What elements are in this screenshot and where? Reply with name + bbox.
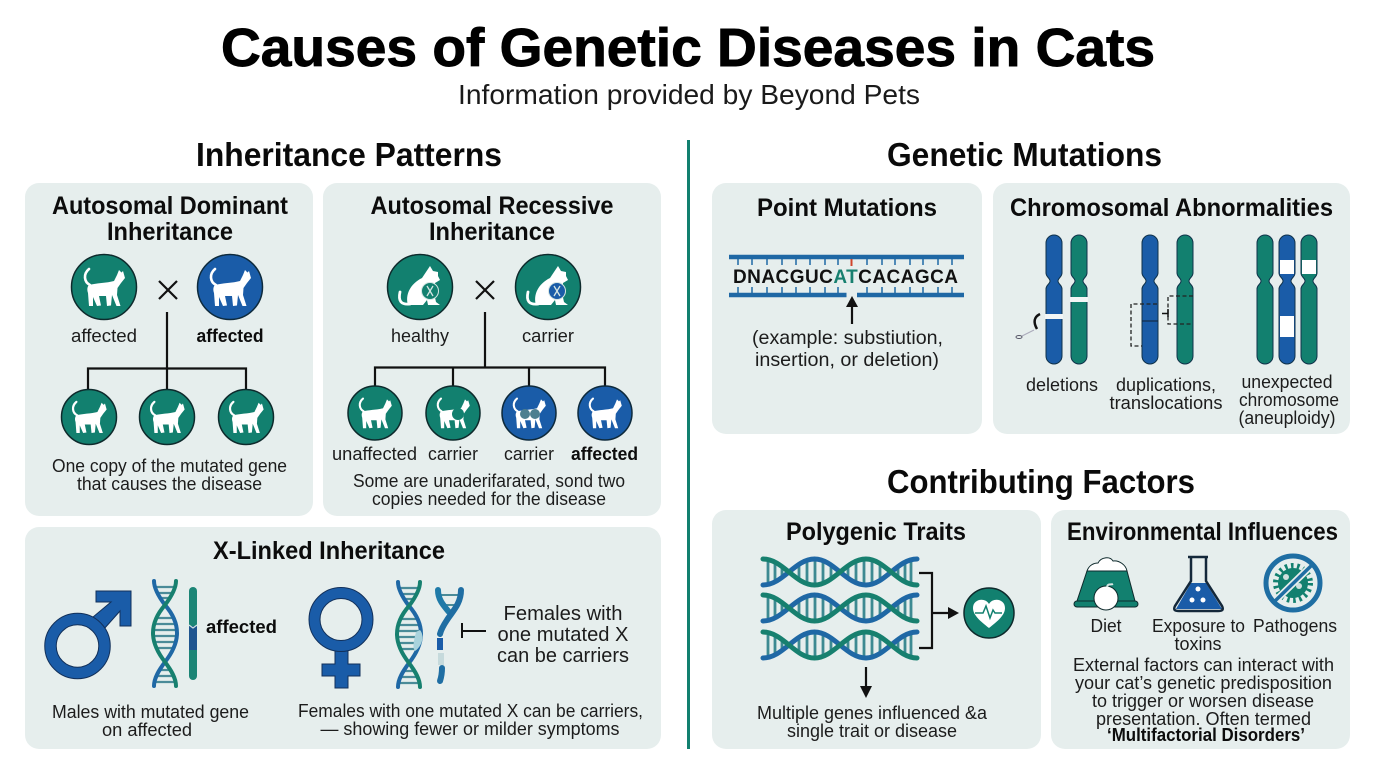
icon: healthy cat bbox=[388, 254, 452, 320]
label: aneuploidy: chromosome bbox=[1239, 390, 1339, 410]
panel heading bbox=[52, 192, 289, 246]
icon: parent cat teal bbox=[72, 254, 136, 320]
caption: males bbox=[52, 702, 249, 740]
panel heading: Autosomal Dominant bbox=[52, 192, 289, 220]
icon: offspring cat 1 bbox=[62, 390, 116, 444]
pedigree lines bbox=[375, 312, 605, 387]
panel heading: X-Linked Inheritance bbox=[213, 537, 445, 565]
label: pathogens: Pathogens bbox=[1253, 616, 1337, 636]
icon: carrier cat bbox=[516, 254, 580, 320]
description bbox=[752, 327, 943, 371]
description: External factors can interact with bbox=[1073, 655, 1334, 675]
label: aneuploidy bbox=[1238, 372, 1339, 428]
label: affected: affected bbox=[206, 617, 277, 637]
labels: offspring: carrier bbox=[428, 444, 478, 464]
description: to trigger or worsen disease bbox=[1092, 691, 1314, 711]
panel: X-Linked Inheritance bbox=[25, 527, 661, 749]
description: presentation. Often termed bbox=[1096, 709, 1311, 729]
labels: offspring: affected bbox=[571, 444, 638, 464]
caption: females bbox=[298, 701, 643, 739]
description bbox=[52, 456, 287, 494]
description bbox=[1073, 655, 1334, 745]
icon: broken X chromosome bbox=[438, 590, 461, 681]
subtitle: Information provided by Beyond Pets bbox=[458, 79, 920, 110]
icon: offspring cat 3 bbox=[218, 390, 274, 444]
description bbox=[353, 471, 625, 509]
icon: carrier kitten blue bbox=[502, 386, 556, 440]
description: Multiple genes influenced &a bbox=[757, 703, 988, 723]
DNA sequence diagram: DNACGUCATCACAGCA bbox=[733, 267, 958, 288]
chromosomes: duplications and translocations bbox=[1131, 235, 1193, 364]
caption: males: Males with mutated gene bbox=[52, 702, 249, 722]
label: aneuploidy: unexpected bbox=[1242, 372, 1332, 392]
title: Causes of Genetic Diseases in Cats bbox=[221, 18, 1155, 78]
description: that causes the disease bbox=[77, 474, 262, 494]
callout: females carriers bbox=[497, 603, 629, 667]
description: One copy of the mutated gene bbox=[52, 456, 287, 476]
label: duplications, translocations: translocations bbox=[1110, 393, 1222, 413]
callout: females carriers: Females with bbox=[504, 603, 622, 625]
panel: Autosomal Dominant Inheritance bbox=[25, 183, 313, 516]
panel: Autosomal Recessive Inheritance bbox=[323, 183, 661, 516]
panel: Point Mutations bbox=[712, 183, 982, 434]
label: affected: affected bbox=[71, 326, 137, 346]
center divider bbox=[687, 140, 690, 749]
panel heading: Inheritance bbox=[429, 218, 555, 246]
panel heading: Chromosomal Abnormalities bbox=[1010, 194, 1333, 222]
description: your cat’s genetic predisposition bbox=[1075, 673, 1332, 693]
heading: Genetic Mutations: Genetic Mutations bbox=[887, 136, 1162, 173]
icon: unaffected kitten bbox=[348, 386, 402, 440]
callout: females carriers: one mutated X bbox=[498, 624, 628, 646]
label: diet: Diet bbox=[1090, 616, 1122, 636]
description: Some are unaderifarated, sond two bbox=[353, 471, 625, 491]
label: deletions: deletions bbox=[1026, 375, 1098, 395]
panel heading: Point Mutations bbox=[757, 194, 937, 222]
arrow: down bbox=[860, 667, 872, 698]
icon: pathogen blocked bbox=[1266, 556, 1320, 610]
label: exposure to toxins bbox=[1152, 616, 1245, 654]
chromosomes: deletions bbox=[1016, 235, 1088, 364]
description: insertion, or deletion) bbox=[755, 349, 939, 371]
icon: flask with toxins bbox=[1174, 557, 1223, 611]
labels: offspring bbox=[332, 444, 638, 464]
labels: offspring: unaffected bbox=[332, 444, 417, 464]
caption: females: Females with one mutated X can be carriers, bbox=[298, 701, 643, 721]
panel heading: Autosomal Recessive bbox=[370, 192, 614, 220]
panel: Environmental Influences bbox=[1051, 510, 1350, 749]
callout: females carriers: can be carriers bbox=[497, 645, 629, 667]
caption: males: on affected bbox=[102, 720, 192, 740]
marker line bbox=[462, 623, 486, 638]
label: duplications, translocations bbox=[1110, 375, 1222, 413]
label: aneuploidy: (aneuploidy) bbox=[1238, 408, 1336, 428]
icon: X chromosome bar bbox=[189, 587, 197, 680]
description: copies needed for the disease bbox=[372, 489, 606, 509]
icon: food bowl bbox=[1074, 558, 1138, 610]
description: ‘Multifactorial Disorders’ bbox=[1107, 725, 1305, 745]
label: healthy: healthy bbox=[391, 326, 449, 346]
panel: Chromosomal Abnormalities bbox=[993, 183, 1350, 434]
heading: Contributing Factors: Contributing Factors bbox=[887, 463, 1195, 500]
icon: female symbol bbox=[314, 593, 368, 688]
description: (example: substiution, bbox=[752, 327, 943, 349]
panel heading: Environmental Influences bbox=[1067, 518, 1338, 546]
pedigree lines bbox=[88, 312, 246, 389]
icon: DNA helix male bbox=[153, 581, 177, 686]
DNA sequence diagram bbox=[729, 257, 964, 295]
icon: offspring cat 2 bbox=[140, 390, 194, 444]
label: duplications, translocations: duplications, bbox=[1116, 375, 1216, 395]
cross symbol bbox=[476, 281, 494, 299]
cross symbol bbox=[159, 281, 177, 299]
panel heading: Inheritance bbox=[107, 218, 233, 246]
icon: male symbol bbox=[50, 591, 131, 673]
chromosomes: aneuploidy bbox=[1257, 235, 1317, 364]
labels: offspring: carrier bbox=[504, 444, 554, 464]
icon: parent cat blue bbox=[198, 254, 262, 320]
panel heading bbox=[370, 192, 614, 246]
arrow: mutation site bbox=[846, 296, 858, 324]
icon: heart health bbox=[964, 588, 1014, 638]
description bbox=[757, 703, 988, 741]
label: carrier: carrier bbox=[522, 326, 574, 346]
label: affected bold: affected bbox=[196, 326, 264, 346]
bracket and arrow bbox=[919, 573, 959, 648]
caption: females: — showing fewer or milder symptoms bbox=[320, 719, 620, 739]
heading: Inheritance Patterns: Inheritance Patterns bbox=[196, 136, 502, 173]
icon: three DNA helices bbox=[763, 559, 917, 658]
icon: DNA helix female bbox=[397, 582, 422, 687]
icon: affected kitten bbox=[578, 386, 632, 440]
label: exposure to toxins: Exposure to bbox=[1152, 616, 1245, 636]
description: single trait or disease bbox=[787, 721, 957, 741]
panel heading: Polygenic Traits bbox=[786, 518, 966, 546]
icon: carrier kitten bbox=[426, 386, 480, 440]
label: exposure to toxins: toxins bbox=[1174, 634, 1222, 654]
panel: Polygenic Traits bbox=[712, 510, 1041, 749]
